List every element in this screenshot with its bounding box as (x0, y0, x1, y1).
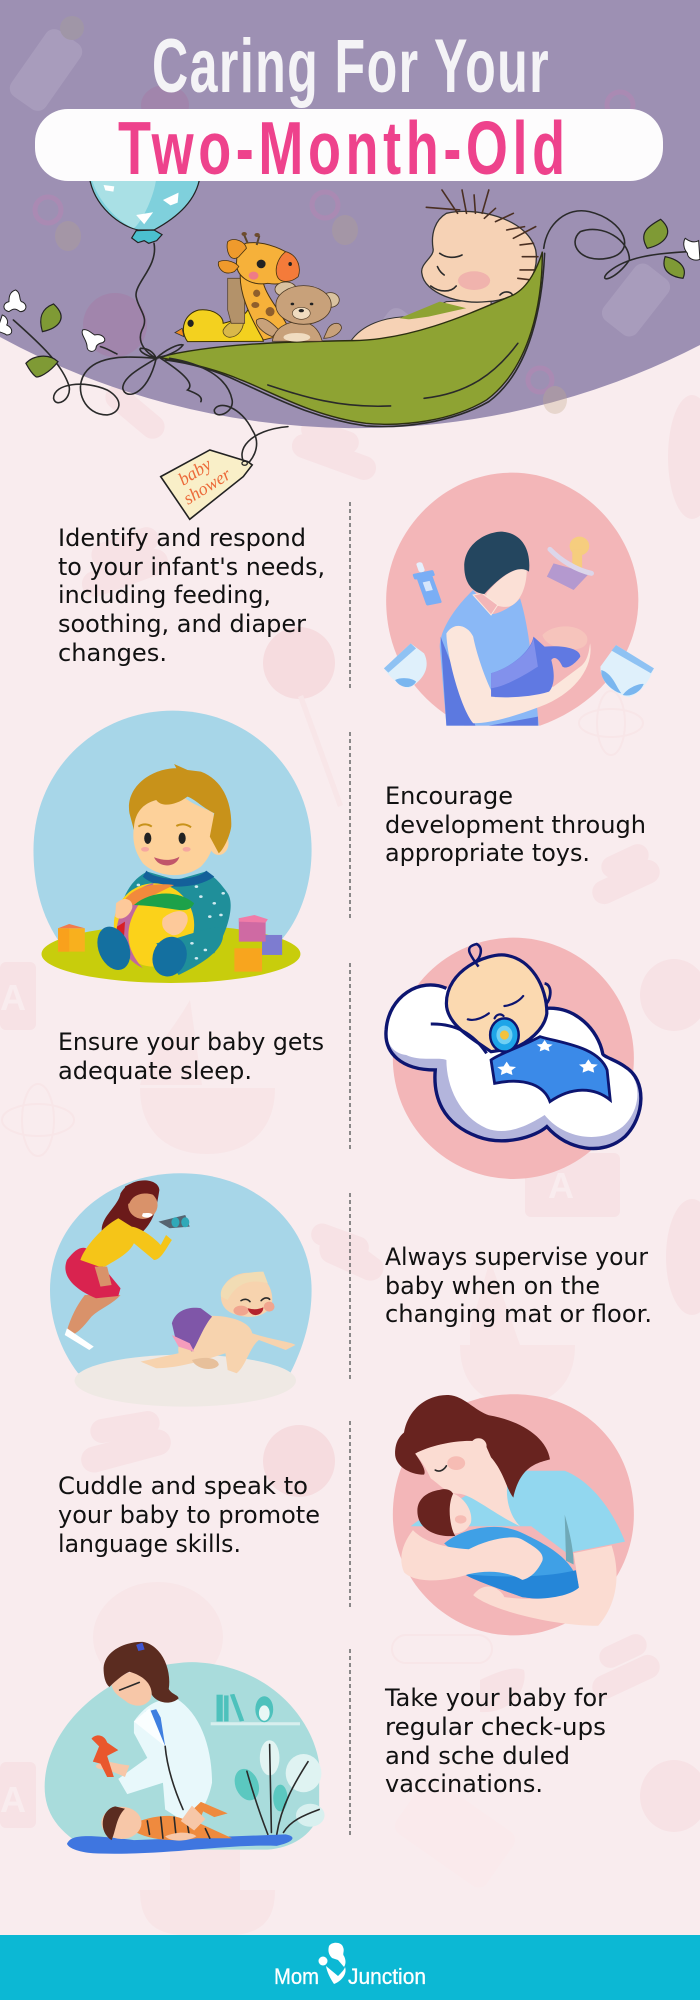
text: respond to needs: to your infant's needs, (58, 553, 325, 581)
background pattern of faint baby items (0, 380, 700, 1936)
giraffe (228, 278, 245, 323)
baby head (422, 211, 536, 302)
illustration: baby in pea pod with toys (0, 190, 700, 519)
icon: mother and child (318, 1943, 346, 1984)
divider lines (349, 502, 351, 1835)
tag (161, 450, 252, 519)
logo text: Mom (274, 1964, 319, 1989)
doctor coat (118, 1699, 212, 1821)
white title pill (35, 109, 663, 181)
footer logo: Junction (348, 1964, 426, 1989)
pod (158, 252, 542, 424)
hand and teddy (96, 1762, 129, 1777)
teddy bear (275, 282, 296, 297)
pod collar (400, 302, 466, 322)
baby (141, 1316, 296, 1373)
tag text: shower (180, 463, 235, 508)
vines right (544, 211, 687, 279)
diapers (384, 643, 427, 688)
baby (440, 1492, 471, 1534)
faint header pattern (6, 16, 674, 414)
shelf (211, 1722, 300, 1725)
cloud shadow (386, 985, 641, 1148)
neck and face (415, 1441, 520, 1526)
white flowers left (4, 290, 26, 312)
pacifier (547, 563, 589, 590)
text: supervise: changing mat or floor. (385, 1300, 652, 1328)
text: respond to needs: soothing, and diaper (58, 610, 306, 638)
text: cuddle and speak: Cuddle and speak to (58, 1472, 308, 1500)
text: encourage development: Encourage (385, 782, 513, 810)
text: encourage development: appropriate toys. (385, 839, 590, 867)
sleeve and top (411, 1471, 625, 1553)
text: adequate sleep: adequate sleep. (58, 1057, 252, 1085)
leaves left (41, 304, 61, 332)
baby head (542, 983, 550, 1007)
illustration: baby with ball and blocks (33, 711, 312, 983)
plants (260, 1740, 279, 1775)
text: adequate sleep (58, 1028, 324, 1085)
background pattern of faint baby items: A (0, 1779, 26, 1820)
illustration: baby sleeping on cloud (386, 938, 641, 1179)
footer logo (274, 1943, 426, 1989)
title: Two-Month-Old: Two-Month-Old (118, 106, 565, 190)
baby body (350, 300, 491, 343)
text: respond to needs (58, 524, 325, 667)
baby on mat (67, 1834, 293, 1854)
baby torso (116, 872, 231, 953)
text: cuddle and speak (58, 1472, 320, 1558)
text: respond to needs: Identify and respond (58, 524, 306, 552)
text: adequate sleep: Ensure your baby gets (58, 1028, 324, 1056)
arms (401, 1530, 543, 1580)
footer bar (0, 1935, 700, 2000)
hands (115, 899, 132, 919)
text: check-ups: vaccinations. (385, 1770, 543, 1798)
illustration: doctor checking baby (45, 1642, 325, 1854)
illustration: balloon (89, 177, 200, 358)
cloud outline (386, 985, 641, 1148)
mother (102, 1180, 159, 1232)
doctor head (112, 1672, 152, 1706)
ball (114, 883, 194, 967)
text: supervise: Always supervise your (385, 1243, 648, 1271)
illustration: mother feeding baby (384, 473, 654, 726)
baby hair (426, 190, 538, 280)
head (133, 798, 215, 875)
text: encourage development: development through (385, 811, 646, 839)
text: supervise (385, 1243, 652, 1328)
vines left (13, 320, 156, 415)
duck (183, 310, 263, 342)
text: check-ups: regular check-ups (385, 1713, 606, 1741)
background pattern of faint baby items: A (548, 1165, 574, 1206)
blocks (58, 928, 85, 952)
tag text: baby (175, 454, 215, 489)
text: supervise: baby when on the (385, 1272, 600, 1300)
text: respond to needs: changes. (58, 639, 167, 667)
pacifier (490, 1018, 519, 1052)
text: encourage development (385, 782, 646, 867)
illustration: mother kissing baby (393, 1394, 634, 1635)
purple header shape (0, 0, 700, 428)
text: respond to needs: including feeding, (58, 581, 271, 609)
text: check-ups (384, 1684, 607, 1798)
text: check-ups: Take your baby for (384, 1684, 607, 1712)
text: cuddle and speak: language skills. (58, 1530, 241, 1558)
left foot and right leg (92, 924, 135, 972)
mother hair (395, 1395, 550, 1498)
illustration: mother watching crawling baby (50, 1173, 312, 1407)
text: cuddle and speak: your baby to promote (58, 1501, 320, 1529)
title: Caring For Your: Caring For Your (152, 24, 549, 109)
background pattern of faint baby items: A (0, 977, 26, 1018)
leaves right (644, 219, 668, 248)
body in blue onesie (491, 1037, 610, 1102)
text: check-ups: and sche duled (385, 1742, 570, 1770)
baby bottle (409, 560, 445, 606)
cloud white (387, 985, 637, 1137)
